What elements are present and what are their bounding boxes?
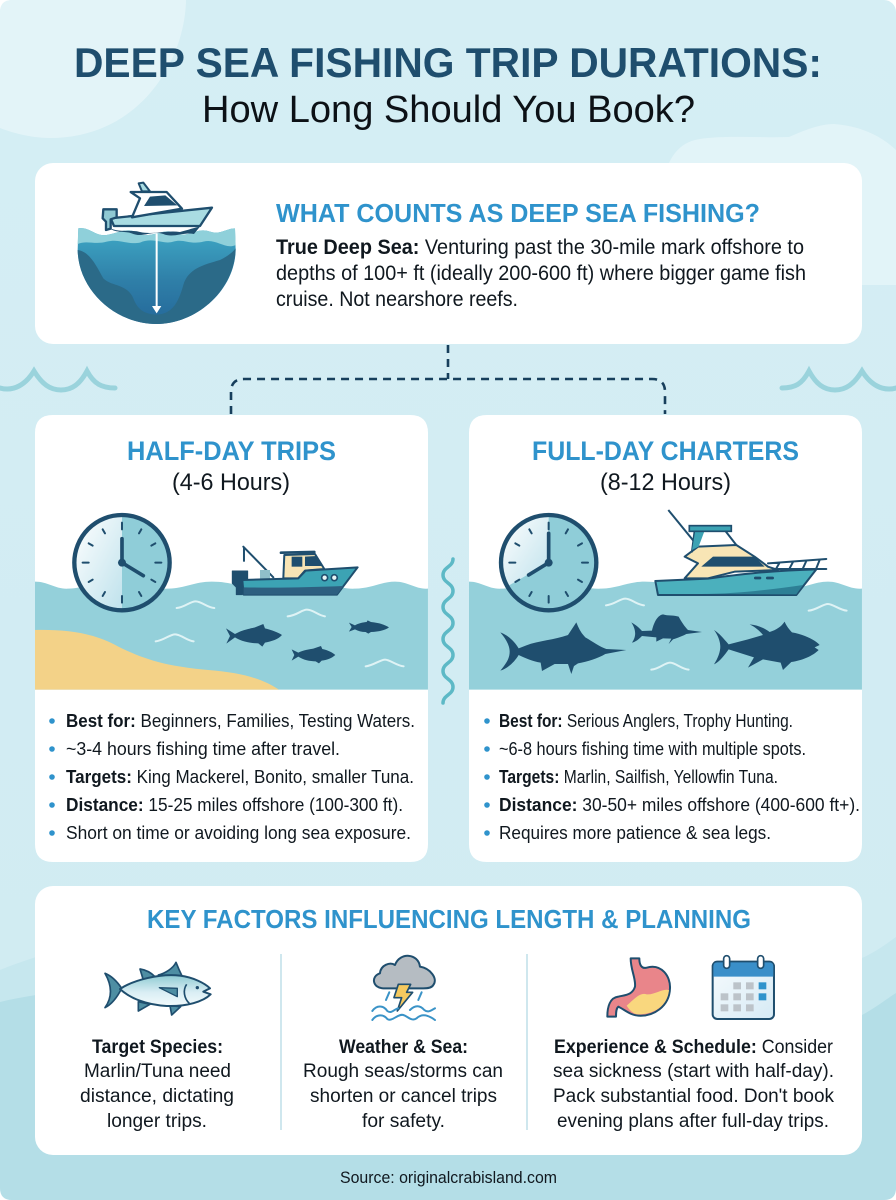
wave marks — [156, 601, 404, 666]
decorative wave right — [782, 371, 896, 390]
bullet list: Targets: Marlin, Sailfish, Yellowfin Tuna. — [499, 766, 778, 787]
decorative wave left — [0, 371, 115, 390]
bullet list — [49, 710, 415, 843]
subheading: (8-12 Hours) — [600, 469, 731, 496]
bullet list: Targets: King Mackerel, Bonito, smaller Tuna. — [66, 766, 414, 787]
marlin — [500, 622, 626, 674]
panel: half-day trips — [35, 415, 428, 862]
text: experience and schedule: sea sickness (start with half-day). — [553, 1061, 834, 1082]
tuna — [714, 622, 820, 670]
sand — [35, 630, 279, 690]
text: experience and schedule: evening plans after full-day trips. — [557, 1111, 829, 1132]
bullet list: ~6-8 hours fishing time with multiple spots. — [499, 738, 806, 759]
clock: full-day — [501, 515, 596, 610]
description text: cruise. Not nearshore reefs. — [276, 288, 518, 311]
subheading: (4-6 Hours) — [172, 469, 290, 496]
clock: half-day — [74, 515, 170, 610]
icon: boat over ocean depth bowl — [78, 183, 236, 324]
icon: storm over sea — [372, 956, 435, 1020]
text: weather and sea — [303, 1037, 503, 1132]
source line: Source: originalcrabisland.com — [340, 1168, 557, 1187]
illustration: full-day scene — [469, 510, 862, 690]
yacht — [655, 510, 826, 595]
bullet list: Distance: 30-50+ miles offshore (400-600 ft+). — [499, 794, 860, 815]
icon: stomach — [607, 958, 670, 1017]
text: experience and schedule: Pack substantial food. Don't book — [553, 1086, 834, 1107]
title line 2: How Long Should You Book? — [202, 89, 695, 131]
text: target species: Target Species: — [92, 1037, 223, 1058]
sailfish — [631, 614, 702, 644]
heading: FULL-DAY CHARTERS — [532, 436, 799, 466]
description text: True Deep Sea: Venturing past the 30-mile mark offshore to — [276, 236, 804, 259]
bullet list: Best for: Serious Anglers, Trophy Hunting. — [499, 710, 793, 731]
text: target species: Marlin/Tuna need — [84, 1061, 231, 1082]
text: experience and schedule: Experience & Schedule: Consider — [554, 1037, 834, 1058]
heading: HALF-DAY TRIPS — [127, 436, 336, 466]
bullet list: Best for: Beginners, Families, Testing Waters. — [66, 710, 415, 731]
bullet list: Requires more patience & sea legs. — [499, 822, 771, 843]
heading: WHAT COUNTS AS DEEP SEA FISHING? — [276, 198, 760, 228]
connector: dashed branching lines — [231, 345, 665, 414]
title line 1: DEEP SEA FISHING TRIP DURATIONS: — [74, 39, 822, 86]
panel: key factors — [35, 886, 862, 1155]
bullet list: Distance: 15-25 miles offshore (100-300 ft). — [66, 794, 403, 815]
water — [35, 582, 428, 690]
panel: full-day charters — [469, 415, 862, 862]
squiggle between cards — [443, 559, 453, 703]
icon: tuna — [105, 962, 211, 1015]
text: weather and sea: Weather & Sea: — [339, 1037, 468, 1058]
wave marks — [606, 599, 847, 670]
water — [469, 582, 862, 690]
text: weather and sea: for safety. — [362, 1111, 445, 1132]
icon: calendar — [713, 956, 774, 1019]
text: target species — [80, 1037, 234, 1132]
text: experience and schedule — [553, 1037, 834, 1132]
bullet list: ~3-4 hours fishing time after travel. — [66, 738, 340, 759]
text: target species: distance, dictating — [80, 1086, 234, 1107]
text: target species: longer trips. — [107, 1111, 207, 1132]
bullet list: Short on time or avoiding long sea exposure. — [66, 822, 411, 843]
illustration: half-day scene — [35, 515, 428, 690]
panel: what counts as deep sea fishing — [35, 163, 862, 344]
description text — [276, 236, 806, 311]
fish group — [226, 620, 389, 663]
text: weather and sea: shorten or cancel trips — [310, 1086, 497, 1107]
heading: KEY FACTORS INFLUENCING LENGTH & PLANNING — [147, 904, 751, 934]
bullet list — [484, 710, 860, 843]
text: weather and sea: Rough seas/storms can — [303, 1061, 503, 1082]
boat — [232, 547, 358, 595]
title — [74, 39, 822, 131]
description text: depths of 100+ ft (ideally 200-600 ft) where bigger game fish — [276, 262, 806, 285]
